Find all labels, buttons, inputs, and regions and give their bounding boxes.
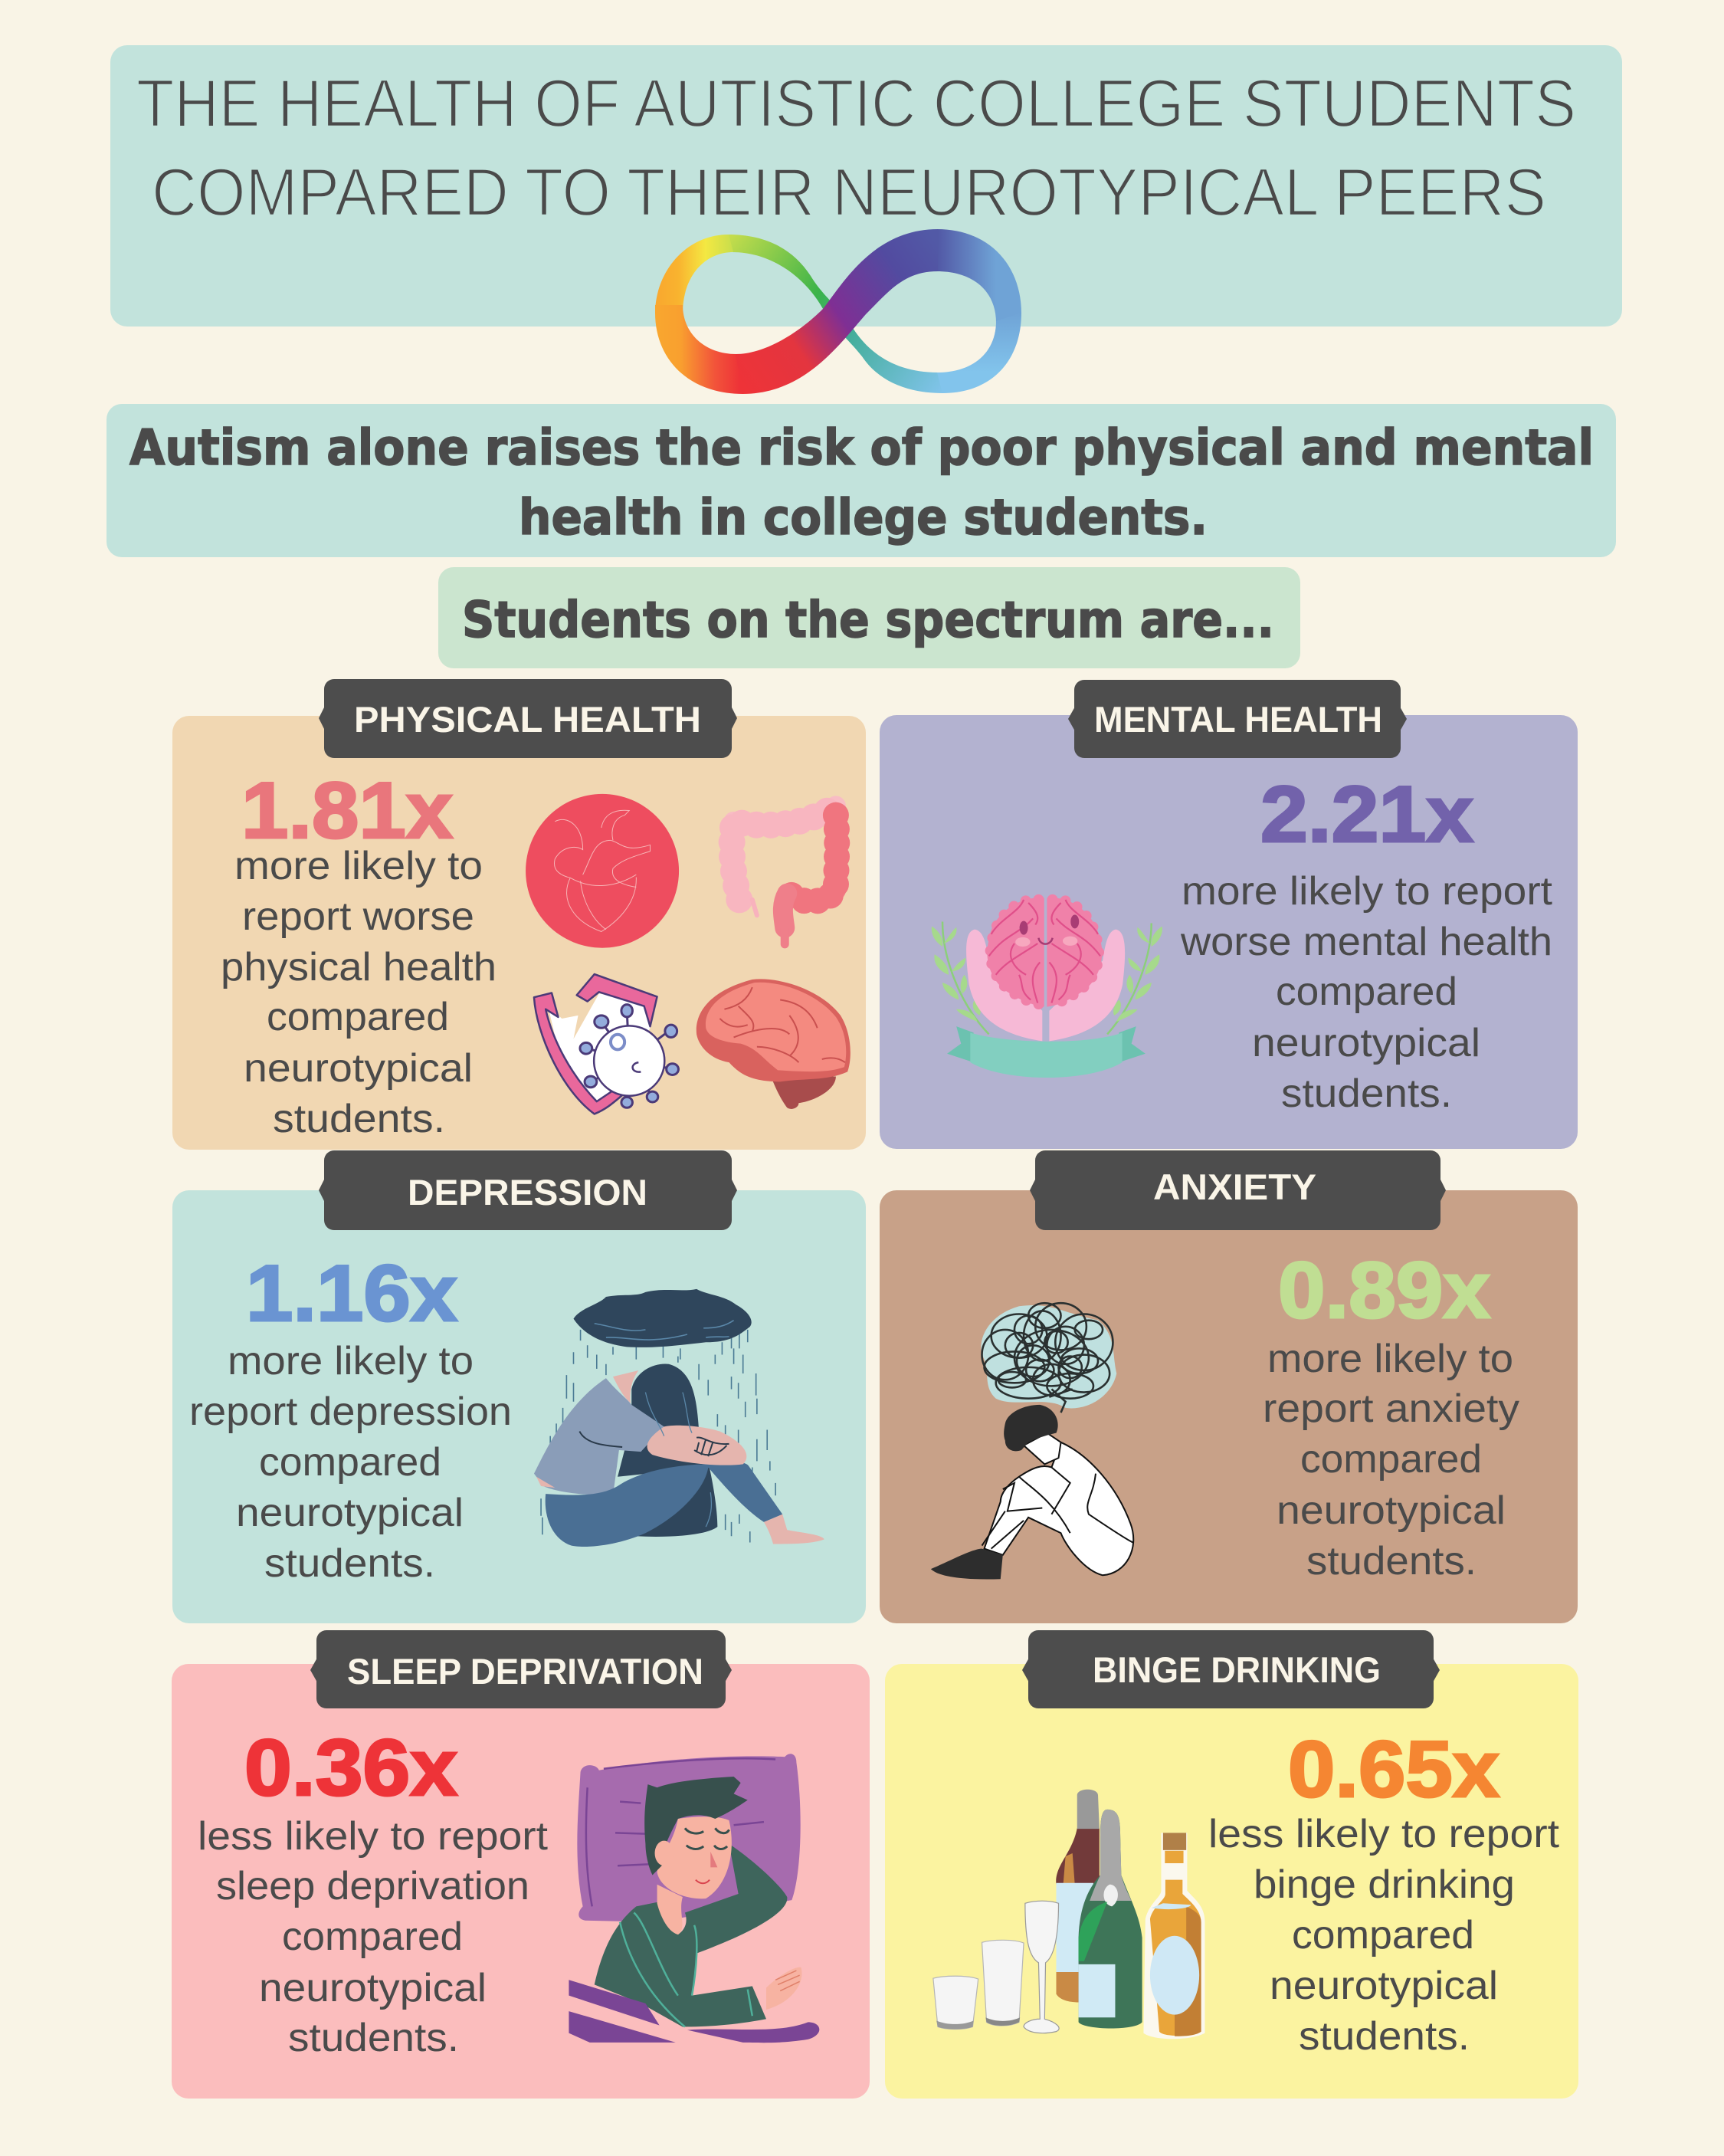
icon: intestine <box>732 806 837 944</box>
stat: 0.89x: 0.89x <box>1278 1246 1490 1335</box>
text: binge drinking description: less likely to report <box>1208 1812 1560 1856</box>
icon: person under rain cloud <box>534 1289 824 1547</box>
text: physical health description: neurotypical <box>244 1046 473 1091</box>
text: anxiety description: compared <box>1300 1437 1482 1482</box>
icon: heart <box>526 794 679 948</box>
text: sleep description: students. <box>288 2016 459 2060</box>
text: mental health description: students. <box>1281 1071 1452 1116</box>
panel: physical health <box>172 679 866 1150</box>
text: depression description: students. <box>264 1541 435 1586</box>
panel: sleep deprivation <box>172 1630 870 2099</box>
text: binge drinking description: binge drinking <box>1254 1862 1515 1907</box>
text: anxiety description: more likely to <box>1267 1337 1513 1381</box>
lead-in text: Students on the spectrum are... <box>462 592 1274 649</box>
text: depression description: compared <box>259 1440 441 1485</box>
stat: 0.65x: 0.65x <box>1288 1725 1499 1814</box>
text: depression description: neurotypical <box>236 1491 464 1535</box>
title panel <box>110 45 1622 327</box>
text: mental health description <box>1180 869 1553 1116</box>
text: sleep description: sleep deprivation <box>216 1864 529 1908</box>
icon: rainbow infinity symbol <box>655 229 1021 394</box>
text: anxiety description: report anxiety <box>1263 1386 1519 1431</box>
tag: sleep deprivation <box>310 1630 732 1708</box>
text: anxiety description: neurotypical <box>1277 1488 1506 1533</box>
subheading line 1: Autism alone raises the risk of poor physical and mental <box>129 420 1594 477</box>
tag: mental health: MENTAL HEALTH <box>1094 699 1382 740</box>
text: physical health description: more likely to <box>234 844 483 888</box>
text: sleep description <box>198 1814 549 2060</box>
tag: binge drinking <box>1022 1630 1440 1708</box>
stat: 1.16x: 1.16x <box>246 1249 457 1338</box>
title line 1: THE HEALTH OF AUTISTIC COLLEGE STUDENTS <box>136 65 1576 141</box>
text: binge drinking description: students. <box>1299 2014 1470 2059</box>
panel: binge drinking <box>885 1630 1578 2099</box>
text: physical health description <box>221 844 497 1141</box>
subheading line 2: health in college students. <box>519 490 1208 546</box>
tag: anxiety <box>1030 1150 1446 1230</box>
stat: 1.81x: 1.81x <box>241 766 453 855</box>
text: binge drinking description: neurotypical <box>1270 1964 1498 2008</box>
text: binge drinking description <box>1208 1812 1560 2059</box>
icon: bottles and glasses <box>933 1790 1205 2039</box>
text: anxiety description <box>1263 1337 1519 1583</box>
icon: brain held in hands <box>932 898 1162 1078</box>
text: mental health description: worse mental health <box>1180 920 1552 964</box>
icon: brain <box>696 979 851 1109</box>
text: physical health description: compared <box>267 995 449 1039</box>
text: physical health description: report worse <box>242 894 474 939</box>
stat: 2.21x: 2.21x <box>1260 770 1473 859</box>
text: physical health description: physical health <box>221 945 497 989</box>
tag: depression: DEPRESSION <box>408 1172 647 1213</box>
text: depression description: report depression <box>189 1390 512 1434</box>
panel: mental health <box>880 680 1578 1149</box>
stat: 0.36x: 0.36x <box>244 1724 457 1813</box>
icon: person with tangled thoughts <box>931 1303 1133 1580</box>
lead-in panel <box>438 567 1300 668</box>
tag: physical health <box>319 679 737 758</box>
text: sleep description: less likely to report <box>198 1814 549 1859</box>
text: mental health description: compared <box>1276 970 1457 1014</box>
icon: sleeping person <box>569 1754 819 2043</box>
text: binge drinking description: compared <box>1292 1913 1474 1957</box>
text: depression description: more likely to <box>228 1339 474 1383</box>
icon: virus breaking shield <box>534 974 678 1114</box>
tag: sleep deprivation: SLEEP DEPRIVATION <box>347 1651 703 1692</box>
text: mental health description: neurotypical <box>1252 1021 1480 1065</box>
tag: mental health <box>1068 680 1407 758</box>
panel: depression <box>172 1150 866 1623</box>
tag: binge drinking: BINGE DRINKING <box>1093 1649 1381 1690</box>
subheading panel <box>107 404 1616 557</box>
title line 2: COMPARED TO THEIR NEUROTYPICAL PEERS <box>152 154 1546 230</box>
panel: anxiety <box>880 1150 1578 1623</box>
text: sleep description: neurotypical <box>259 1966 487 2010</box>
tag: anxiety: ANXIETY <box>1153 1167 1316 1207</box>
text: anxiety description: students. <box>1306 1539 1477 1583</box>
text: physical health description: students. <box>273 1097 445 1141</box>
text: sleep description: compared <box>282 1915 463 1959</box>
text: depression description <box>189 1339 512 1586</box>
text: mental health description: more likely to report <box>1182 869 1553 914</box>
tag: depression <box>319 1150 737 1230</box>
tag: physical health: PHYSICAL HEALTH <box>354 699 701 740</box>
